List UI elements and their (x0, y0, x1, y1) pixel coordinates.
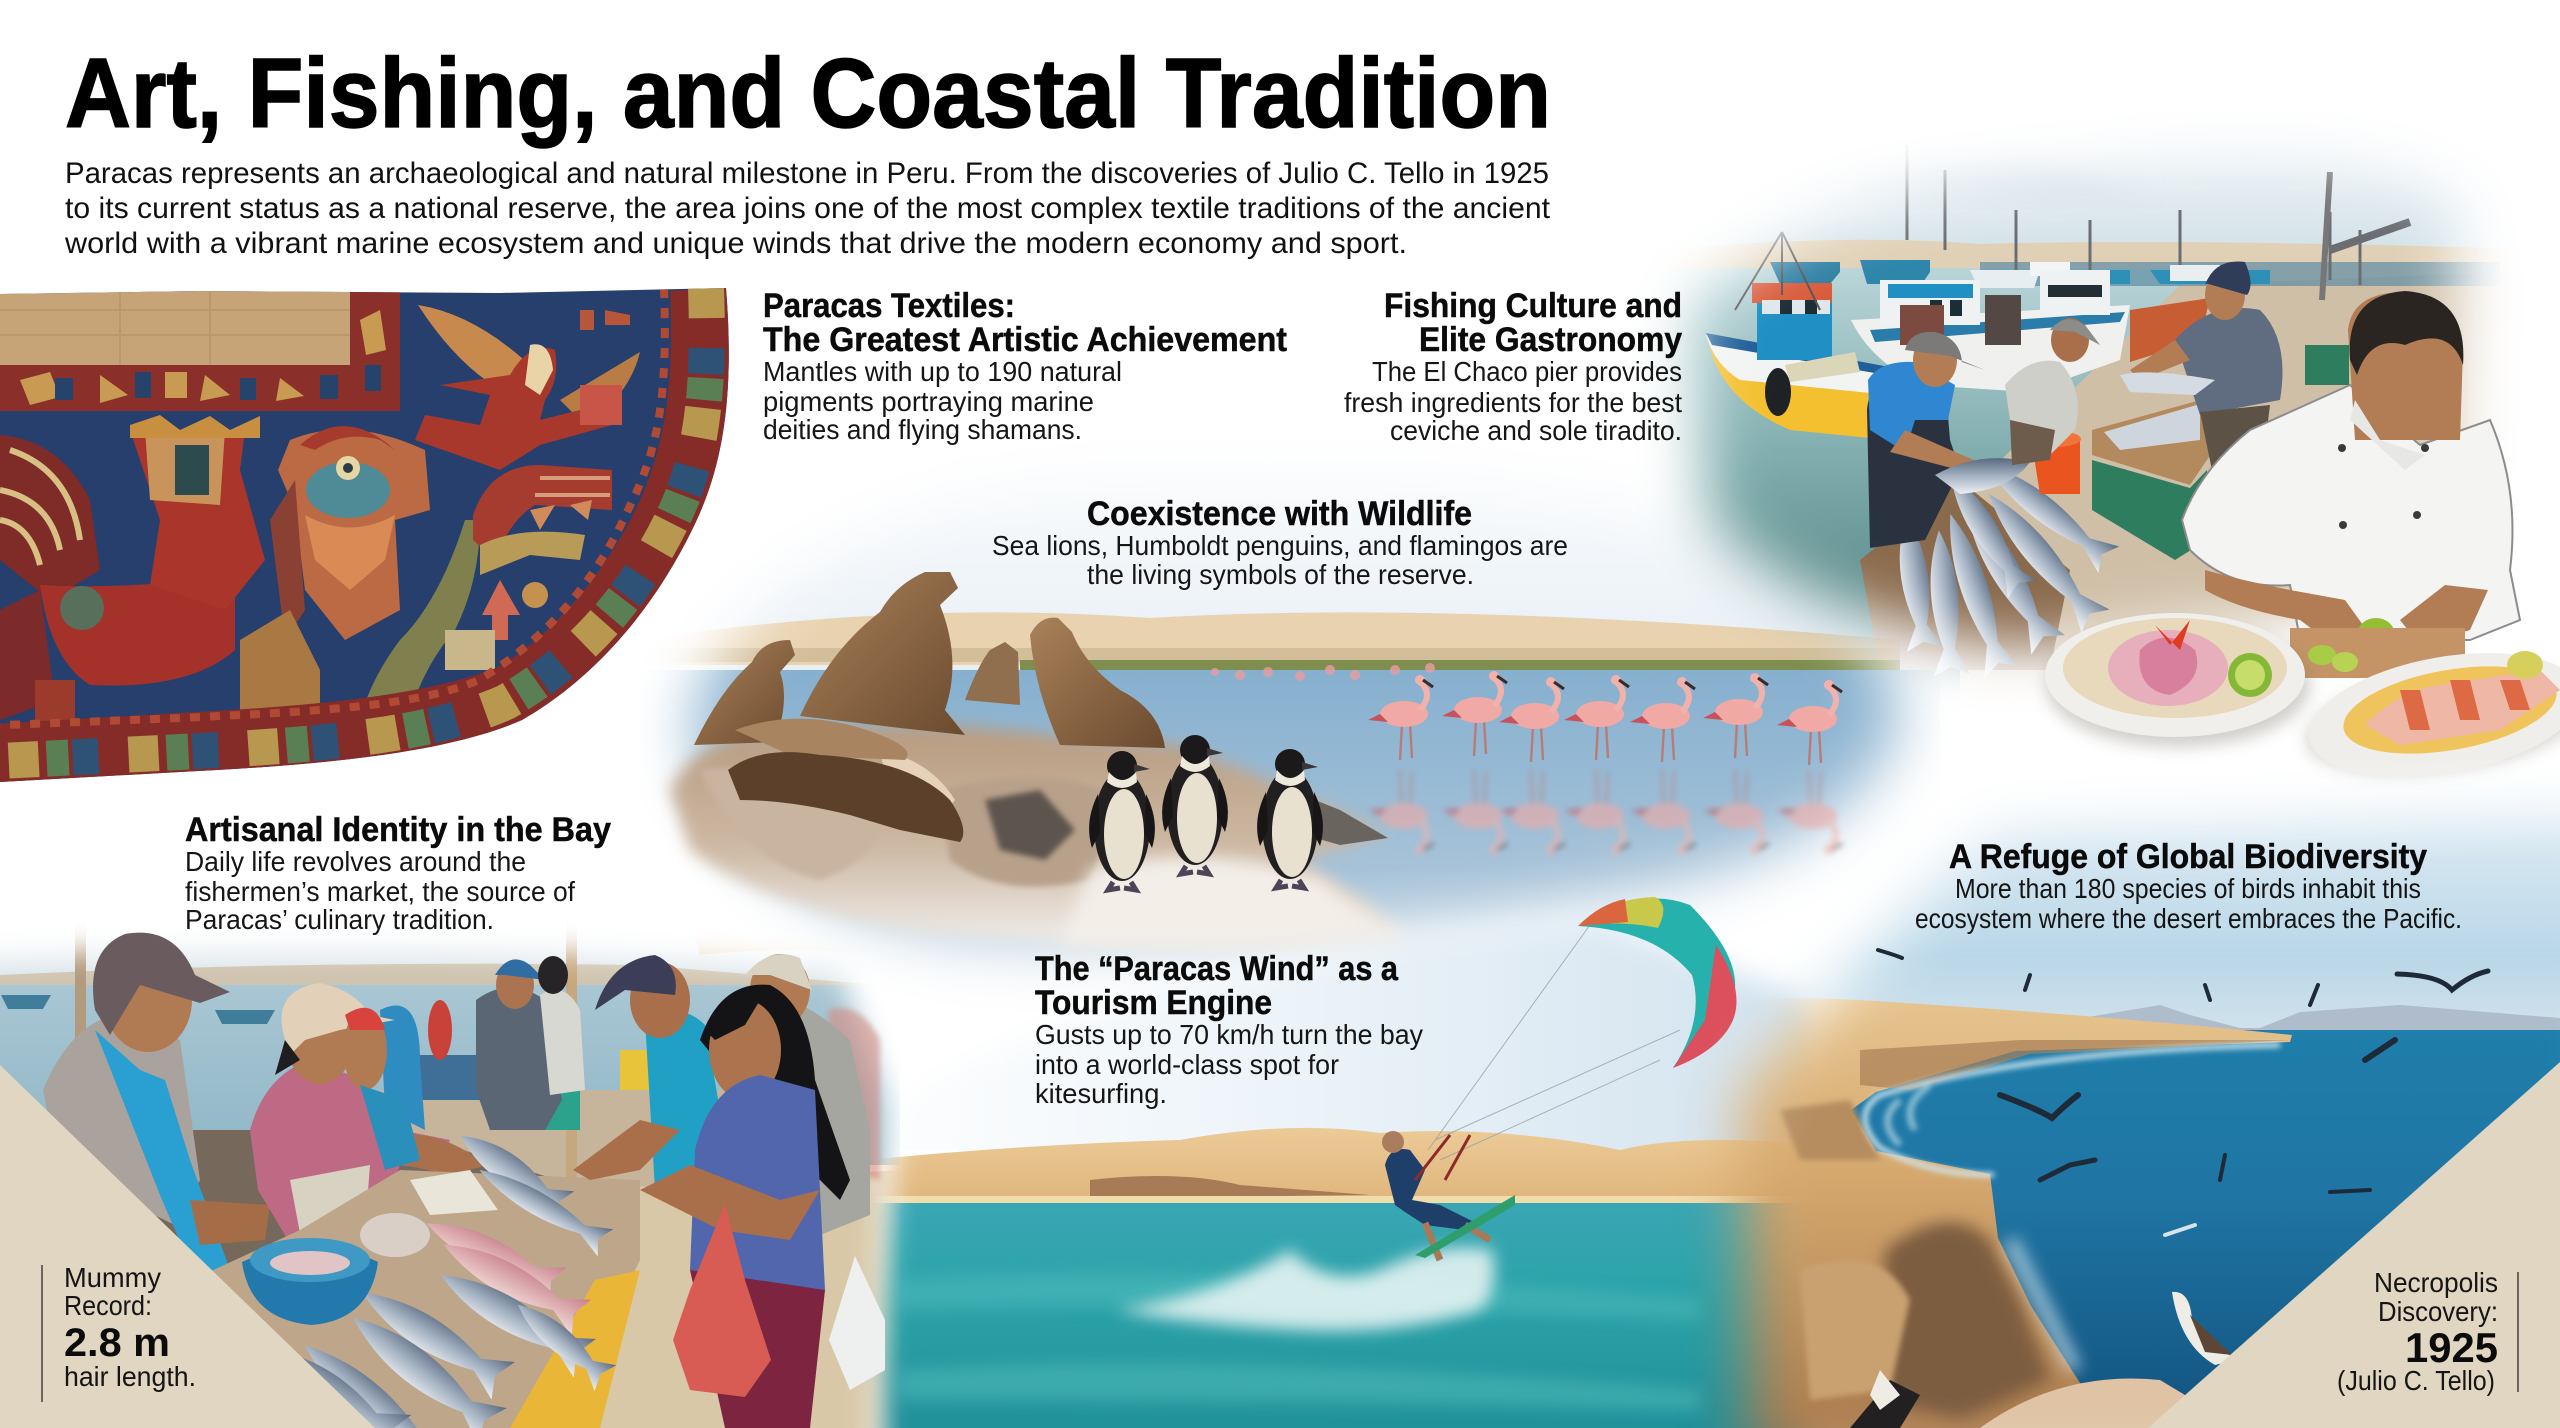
lagoon water (660, 670, 1932, 952)
market people (43, 933, 885, 1428)
flying shaman (415, 305, 640, 470)
dish: tiradito plate (2299, 634, 2560, 796)
text block: artisanal identity: Daily life revolves around the (185, 846, 526, 877)
panel: paracas wind kitesurfing scene (820, 897, 1860, 1428)
kitesurfer (1382, 1131, 1515, 1260)
text block: paracas wind: into a world-class spot for (1035, 1049, 1339, 1080)
text block: fishing culture: Fishing Culture and (1384, 287, 1682, 325)
ocean (1840, 1030, 2560, 1428)
text block: global biodiversity (1915, 838, 2462, 934)
undyed cloth (0, 290, 350, 365)
text block: fishing culture: The El Chaco pier provides (1372, 356, 1682, 387)
red winged stripes and symbols (240, 385, 622, 740)
boat: blue cabin (1706, 232, 1884, 438)
text block: artisanal identity (185, 811, 611, 935)
stat corner: mummy record: Record: (64, 1290, 152, 1321)
awning and poles (75, 932, 790, 1178)
panel: paracas textile artwork (0, 285, 740, 790)
inner border bands (0, 290, 400, 411)
stat corner: necropolis discovery (2148, 1062, 2560, 1428)
sea (820, 1203, 1860, 1428)
stat corner: mummy record: Mummy (64, 1262, 161, 1293)
orange sea deity centre (270, 426, 430, 640)
sea lions (694, 572, 1165, 842)
flamingos (1368, 671, 1842, 765)
text block: global biodiversity: ecosystem where the desert embraces the Pacific. (1915, 903, 2462, 934)
stat corner: mummy record: 2.8 m (64, 1321, 170, 1365)
text block: fishing culture: ceviche and sole tiradito. (1390, 415, 1682, 446)
sea serpent (360, 520, 480, 730)
background stalls (410, 1000, 660, 1130)
panel: biodiversity scene (1580, 760, 2560, 1428)
kite lines (1428, 925, 1680, 1160)
text block: paracas wind: Tourism Engine (1035, 984, 1272, 1022)
buyers: man in blue and woman with bags (573, 954, 885, 1428)
stat corner: necropolis discovery: Necropolis (2374, 1267, 2498, 1298)
rocks (670, 725, 1420, 950)
vendor: woman in pink (250, 983, 488, 1260)
kite (1578, 897, 1737, 1068)
text block: paracas wind: The “Paracas Wind” as a (1035, 950, 1399, 988)
text block: paracas wind: Gusts up to 70 km/h turn the bay (1035, 1019, 1423, 1050)
vendor: man in grey with blue apron (43, 933, 270, 1300)
text block: global biodiversity: More than 180 species of birds inhabit this (1955, 873, 2421, 904)
outer woven border (0, 288, 736, 790)
text block: fishing culture: fresh ingredients for the best (1344, 387, 1682, 418)
dish: ceviche bowl (2045, 613, 2465, 747)
distant mountains (2010, 1005, 2560, 1040)
intro paragraph: world with a vibrant marine ecosystem and unique winds that drive the modern economy and sport. (64, 227, 1407, 260)
text block: fishing culture (1344, 287, 1682, 446)
pier fish pile and crate (1860, 345, 2349, 678)
text block: coexistence with wildlife (992, 495, 1568, 590)
intro paragraph (64, 157, 1551, 260)
text block: fishing culture: Elite Gastronomy (1419, 321, 1682, 359)
stat corner: necropolis discovery: Discovery: (2378, 1296, 2498, 1327)
market table with fish (170, 1120, 640, 1428)
birds in flight (1878, 950, 2488, 1235)
text block: paracas textiles (763, 287, 1287, 445)
text block: paracas textiles: deities and flying shamans. (763, 414, 1082, 445)
dunes (878, 1128, 1786, 1196)
distant flamingos (1211, 663, 1435, 681)
distant boats (1770, 260, 2270, 288)
stat corner: necropolis discovery: (Julio C. Tello) (2337, 1365, 2495, 1396)
text block: paracas textiles: pigments portraying marine (763, 386, 1094, 417)
spray (1115, 1248, 1494, 1331)
text block: artisanal identity: Artisanal Identity in the Bay (185, 811, 611, 849)
text block: coexistence with wildlife: Coexistence with Wildlife (1087, 495, 1472, 533)
text block: coexistence with wildlife: the living symbols of the reserve. (1087, 559, 1474, 590)
stat corner: mummy record (0, 1065, 375, 1428)
text block: paracas wind: kitesurfing. (1035, 1078, 1167, 1109)
panel: fishing culture scene (1656, 146, 2560, 781)
surf (1865, 1045, 2280, 1175)
masts (1907, 145, 2410, 300)
desert dunes (640, 612, 1900, 665)
panel: coexistence with wildlife scene (656, 507, 1935, 980)
intro paragraph: Paracas represents an archaeological and natural milestone in Peru. From the discoveries of Julio C. Tello in 1925 (65, 157, 1549, 190)
boat: white hulls (1851, 270, 2210, 392)
penguins (1089, 735, 1323, 890)
text block: artisanal identity: Paracas’ culinary tradition. (185, 904, 494, 935)
seabirds on the cliff (1850, 1292, 2235, 1428)
stat corner: mummy record: hair length. (64, 1361, 196, 1392)
fishermen (1867, 261, 2282, 548)
text block: artisanal identity: fishermen’s market, the source of (185, 876, 575, 907)
text block: paracas wind (1035, 950, 1423, 1109)
text block: global biodiversity: A Refuge of Global Biodiversity (1949, 838, 2427, 876)
title: Art, Fishing, and Coastal Tradition (65, 38, 1551, 148)
stat corner: necropolis discovery: 1925 (2405, 1324, 2498, 1371)
chef (2182, 291, 2520, 652)
text block: coexistence with wildlife: Sea lions, Humboldt penguins, and flamingos are (992, 530, 1568, 561)
desert cliffs (1580, 998, 2292, 1428)
text block: paracas textiles: The Greatest Artistic Achievement (763, 321, 1287, 359)
flamingo reflections (1368, 770, 1842, 855)
deity figure left (0, 415, 265, 750)
text block: paracas textiles: Mantles with up to 190 natural (763, 356, 1122, 387)
text block: paracas textiles: Paracas Textiles: (763, 287, 1015, 325)
intro paragraph: to its current status as a national reserve, the area joins one of the most complex textile traditions of the ancient (65, 192, 1551, 225)
